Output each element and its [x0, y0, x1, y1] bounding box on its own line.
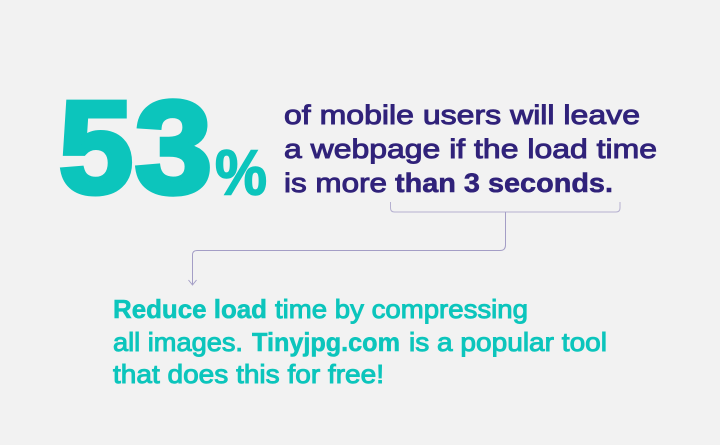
- tip text: [113, 294, 607, 389]
- tip text: all images.: [113, 327, 243, 357]
- statistic description: than 3 seconds.: [395, 168, 613, 198]
- tip text: Reduce load: [113, 294, 267, 324]
- statistic description: of mobile users will leave: [284, 100, 640, 130]
- big statistic: 53%: [59, 74, 267, 220]
- bracket under "than 3 seconds": [390, 202, 620, 212]
- big statistic: 53%: 3: [135, 74, 212, 220]
- big statistic: 53%: %: [215, 136, 267, 208]
- statistic description: a webpage if the load time: [284, 134, 657, 164]
- tip text: time by compressing: [275, 294, 528, 324]
- statistic description: is more: [284, 168, 387, 198]
- big statistic: 53%: 5: [59, 74, 133, 220]
- tip text: Tinyjpg.com: [252, 327, 400, 357]
- tip text: is a popular tool: [409, 327, 607, 357]
- statistic description: [284, 100, 657, 198]
- connector arrow to tip: [188, 212, 506, 285]
- tip text: that does this for free!: [113, 359, 384, 389]
